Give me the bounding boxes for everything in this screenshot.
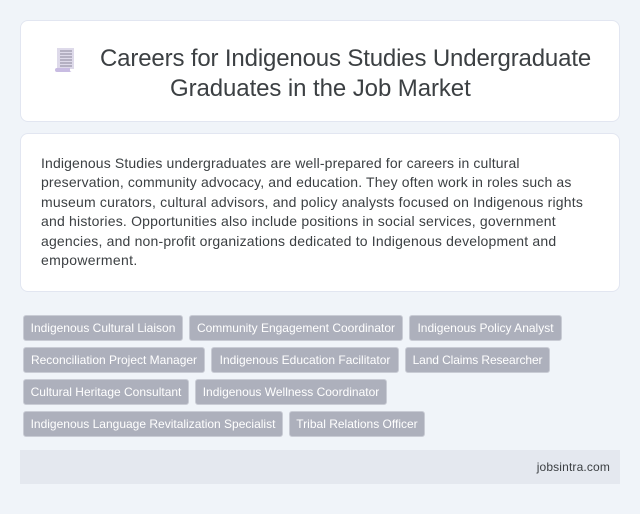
job tags (23, 315, 562, 437)
tag (211, 347, 399, 373)
title: Careers for Indigenous Studies Undergraduate (100, 45, 591, 72)
tag: Indigenous Education Facilitator (220, 353, 390, 367)
tag (195, 379, 387, 405)
description text: preservation, community advocacy, and education. They often work in roles such as (41, 174, 572, 190)
tag (23, 411, 283, 437)
tag (23, 315, 183, 341)
description text: agencies, and non-profit organizations dedicated to Indigenous development and (41, 232, 556, 248)
tag: Indigenous Policy Analyst (417, 321, 554, 335)
tag: Reconciliation Project Manager (31, 353, 197, 367)
panel: title card (20, 20, 620, 122)
footer bar (20, 450, 620, 484)
icon: document scroll (55, 48, 74, 72)
tag: Community Engagement Coordinator (197, 321, 395, 335)
panel: description (20, 133, 620, 292)
description text (41, 154, 583, 268)
tag (23, 347, 205, 373)
title (100, 45, 591, 102)
description text: empowerment. (41, 252, 138, 268)
tag: Land Claims Researcher (413, 353, 542, 367)
tag: Indigenous Cultural Liaison (31, 321, 175, 335)
tag (189, 315, 403, 341)
tag: Indigenous Wellness Coordinator (203, 385, 379, 399)
tag: Indigenous Language Revitalization Specialist (31, 417, 275, 431)
tag (289, 411, 425, 437)
footer source: jobsintra.com (537, 460, 610, 474)
description text: Indigenous Studies undergraduates are well-prepared for careers in cultural (41, 154, 520, 170)
tag (409, 315, 562, 341)
tag: Tribal Relations Officer (296, 417, 418, 431)
description text: museum curators, cultural advisors, and policy analysts focused on Indigenous rights (41, 194, 583, 210)
title: Graduates in the Job Market (170, 74, 471, 102)
tag (405, 347, 550, 373)
tag (23, 379, 189, 405)
tag: Cultural Heritage Consultant (31, 385, 181, 399)
description text: and histories. Opportunities also include positions in social services, government (41, 213, 556, 229)
